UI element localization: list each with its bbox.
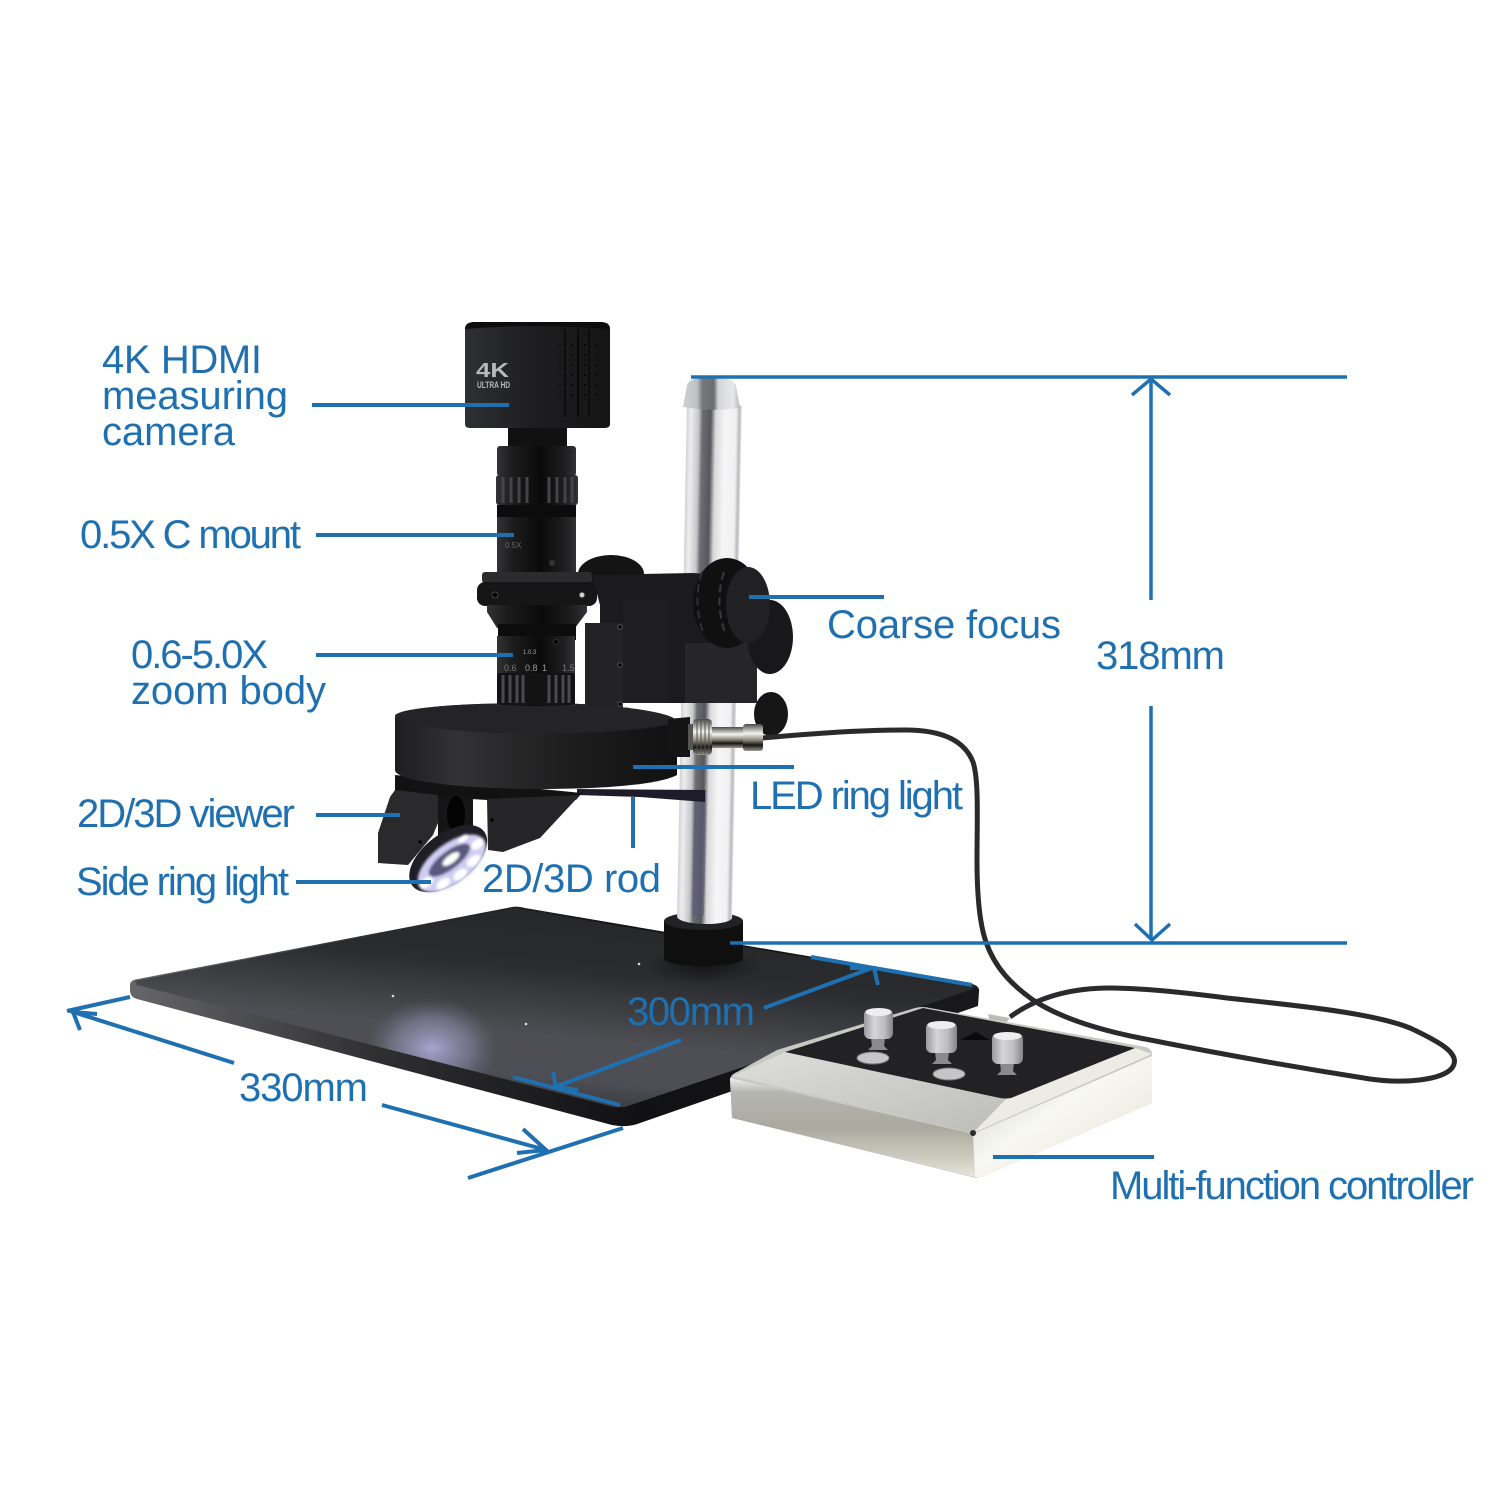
depth dimension 300mm xyxy=(513,957,972,1105)
zoom body xyxy=(497,624,576,706)
focus arm and block xyxy=(585,573,757,710)
label: coarse focus: Coarse focus xyxy=(827,603,1061,647)
mount clamp xyxy=(477,572,597,628)
infographic canvas xyxy=(66,322,1474,1200)
controller buttons xyxy=(857,1052,965,1080)
base plate xyxy=(130,907,979,1126)
controller knobs xyxy=(864,1008,1023,1075)
label: width: 330mm xyxy=(239,1066,368,1110)
label: height: 318mm xyxy=(1096,634,1225,678)
cable xyxy=(762,730,1454,1081)
zoom body: 1 xyxy=(542,663,547,673)
2D/3D rod xyxy=(577,789,705,802)
zoom body: 1.5 xyxy=(562,663,575,673)
zoom scale markings: 0.6 xyxy=(504,663,517,673)
label: camera: 4K HDMI xyxy=(102,338,262,382)
2D/3D viewer xyxy=(378,775,582,865)
label: side ring light: Side ring light xyxy=(76,860,289,904)
back focus knob xyxy=(578,555,644,593)
label: controller: Multi-function controller xyxy=(1110,1164,1474,1208)
side ring light xyxy=(397,812,500,906)
lens marking: 0.5X xyxy=(505,541,522,550)
label: viewer: 2D/3D viewer xyxy=(77,792,295,836)
camera logo: 4K xyxy=(476,360,510,382)
label: zoom body: 0.6-5.0X xyxy=(131,633,268,677)
label: zoom body: zoom body xyxy=(131,669,326,713)
pole base collar xyxy=(664,912,743,966)
camera logo xyxy=(476,360,510,390)
zoom body: 0.8 xyxy=(525,663,538,673)
zoom body: 1.0.3 xyxy=(523,650,537,656)
camera lens column xyxy=(496,427,578,574)
label: camera: measuring xyxy=(102,374,288,418)
rear right focus knob xyxy=(747,600,793,674)
height dimension 318mm xyxy=(691,377,1347,943)
camera logo: ULTRA HD xyxy=(477,380,510,390)
cable connector xyxy=(688,719,763,755)
camera body xyxy=(465,322,610,428)
leader lines xyxy=(296,405,1154,1157)
label: rod: 2D/3D rod xyxy=(482,857,661,901)
coarse focus knob xyxy=(693,558,770,648)
label: C mount: 0.5X C mount xyxy=(80,513,301,557)
multi-function controller xyxy=(730,1007,1152,1178)
label: camera: camera xyxy=(102,410,236,454)
label: depth: 300mm xyxy=(627,990,755,1034)
label: camera xyxy=(102,338,288,454)
LED ring light disc xyxy=(395,703,690,789)
support pole xyxy=(677,378,742,925)
label: LED ring light: LED ring light xyxy=(750,774,963,818)
lower lock knob xyxy=(754,692,788,736)
label: zoom body xyxy=(131,633,326,713)
width dimension 330mm xyxy=(67,997,623,1178)
